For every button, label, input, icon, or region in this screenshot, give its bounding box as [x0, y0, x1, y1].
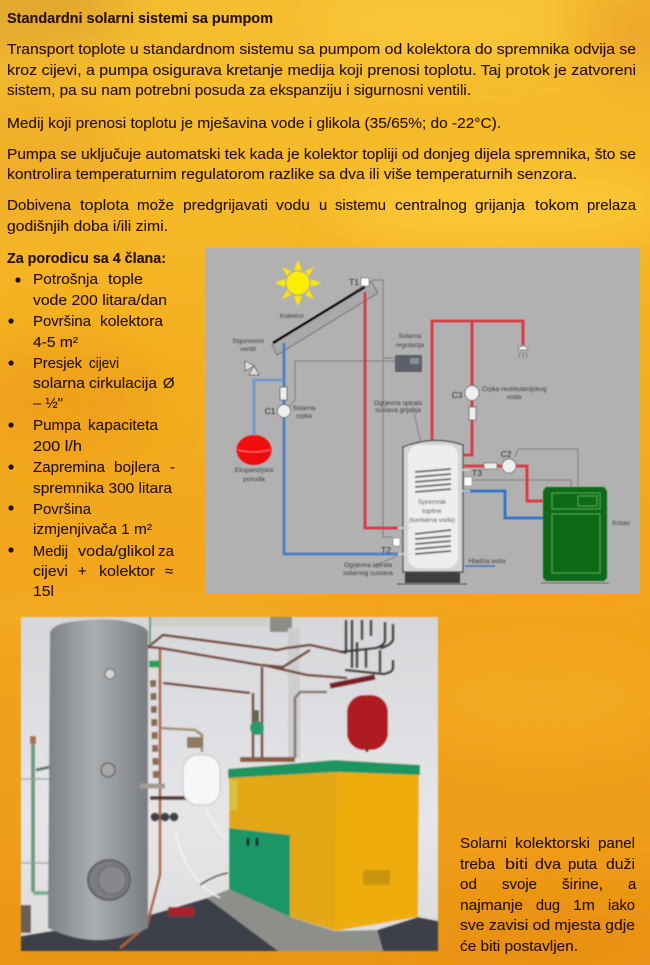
text block: collector panel note: duži	[606, 857, 635, 873]
bullet list: specifications: kapaciteta	[88, 418, 159, 434]
bullet list: specifications: 15l	[33, 584, 54, 600]
safety valve	[232, 338, 264, 375]
storage tank: sustava grijanja	[375, 407, 421, 414]
text block: collector panel note: dva	[535, 857, 562, 873]
bullet list: specifications	[8, 272, 175, 600]
storage tank: (kantarna voda)	[409, 517, 455, 524]
text block: heat use: prelaza	[587, 198, 637, 214]
solar collector	[272, 281, 378, 355]
text block: heat use: u	[319, 198, 327, 214]
text block: heat use	[7, 198, 637, 235]
storage tank: Ogrjevna spirala	[374, 400, 422, 407]
bullet list: specifications: cijevi	[89, 356, 119, 372]
storage tank: Ogrjevna spirala	[344, 562, 392, 569]
text block: collector panel note: kolektorski	[515, 836, 590, 852]
text block: heat use: vodu	[276, 198, 310, 214]
text block: pump control: kontrolira temperaturnim regulatorom razlike sa dva ili više temperaturnih senzora.	[7, 167, 577, 183]
pump C3: voda	[507, 394, 521, 401]
text block: collector panel note: širine,	[562, 877, 603, 893]
bullet list: specifications: Presjek	[33, 356, 83, 372]
text block: collector panel note: će biti postavljen.	[460, 939, 578, 955]
sensors T2 and T3	[381, 468, 482, 555]
text block: collector panel note: treba	[460, 857, 496, 873]
sensors T2 and T3: T2	[381, 545, 391, 555]
text block: heat use: sistemu	[335, 198, 386, 214]
text block: heat use: godišnjih doba i/ili zimi.	[7, 219, 168, 235]
green circulation pump	[240, 710, 295, 762]
text block: heat use: može	[137, 198, 174, 214]
pipes on wall	[120, 635, 347, 948]
pump C2	[484, 449, 516, 473]
bullet list: specifications: kolektor	[99, 564, 155, 580]
solar controller	[395, 333, 424, 372]
text block: collector panel note: 1m	[573, 898, 595, 914]
bullet list: specifications: za	[158, 544, 175, 560]
cold water label: Hladna voda	[468, 558, 506, 565]
storage tank: Spremnik	[418, 499, 447, 506]
text block: heat use: predgrijavati	[183, 198, 268, 214]
bullet list: specifications: Površina	[33, 502, 92, 518]
diagram: solar heating system schematic	[205, 248, 640, 594]
bullet list: specifications: bojlera	[114, 460, 161, 476]
boiler: Kotao	[612, 520, 630, 527]
bullet list: specifications: tople	[108, 272, 143, 288]
text block: heat use: toplota	[80, 198, 130, 214]
bullet list: specifications: Zapremina	[33, 460, 106, 476]
text block: heat use: grijanja	[475, 198, 526, 214]
solar collector: Kolektor	[280, 313, 305, 320]
text block: medium: Medij koji prenosi toplotu je mješavina vode i glikola (35/65%; do -22°C).	[7, 116, 501, 132]
expansion vessel	[235, 435, 274, 483]
bullet list: specifications: spremnika 300 litara	[33, 481, 173, 497]
storage tank: solarnog sustava	[343, 570, 393, 577]
text block: pump control	[7, 147, 636, 183]
pump C2: C2	[501, 449, 512, 459]
yellow and green boiler	[228, 760, 420, 931]
wall and floor tones	[21, 617, 438, 951]
icon: sun	[275, 260, 321, 306]
bullet list: specifications: ≈	[165, 564, 173, 580]
storage tank: topline	[422, 508, 442, 515]
text block: collector panel note: iako	[608, 898, 635, 914]
pump C1: Solarna	[293, 405, 316, 412]
text block: heat use: centralnog	[395, 198, 467, 214]
wall pipe left green	[21, 617, 160, 893]
text block: intro paragraph	[7, 42, 636, 99]
dark pipe cluster top right	[340, 620, 393, 674]
pump C3: Crpka recirkulacijskog	[482, 386, 547, 393]
white expansion vessel	[183, 755, 220, 805]
sensors T2 and T3: T3	[472, 468, 482, 478]
text block: collector panel note: puta	[568, 857, 598, 873]
text block: heat use: tokom	[535, 198, 579, 214]
text block: collector panel note: svoje	[502, 877, 537, 893]
text block: collector panel note: Solarni	[460, 836, 507, 852]
bullet list: specifications: vode 200 litara/dan	[33, 293, 167, 309]
bullet list: specifications: voda/glikol	[78, 544, 155, 560]
bullet list: specifications: cijevi	[33, 564, 68, 580]
bullet list: specifications: 200 l/h	[33, 439, 82, 455]
wiring	[288, 280, 578, 567]
pump C1	[265, 387, 316, 420]
pump C1: crpka	[296, 413, 312, 420]
solar controller: regulacija	[396, 342, 424, 349]
text block: collector panel note: najmanje	[460, 898, 523, 914]
sensor T1	[349, 277, 369, 287]
pump C3: C3	[452, 390, 463, 400]
text block: collector panel note: sve zavisi od mjesta gdje	[460, 918, 635, 934]
text block: collector panel note	[460, 836, 637, 955]
bullet list: specifications: kolektora	[100, 314, 164, 330]
text block: intro paragraph: sistem, pa su nam potrebni posuda za ekspanziju i sigurnosni ventili.	[7, 83, 471, 99]
bullet list: specifications: Potrošnja	[33, 272, 99, 288]
safety valve: ventil	[240, 346, 256, 353]
fittings and pipework beside tank	[150, 680, 228, 916]
bullet list: specifications: 4-5 m²	[33, 335, 78, 351]
text block: collector panel note: dug	[536, 898, 560, 914]
storage tank	[343, 400, 470, 584]
pipes: blue cold circuit	[254, 343, 544, 566]
bullet list: specifications: izmjenjivača 1 m²	[33, 522, 152, 538]
photo: boiler room installation	[21, 617, 438, 951]
large grey tank	[48, 619, 165, 940]
bullet list: specifications: Pumpa	[33, 418, 82, 434]
bullet list: specifications: Medij	[33, 544, 68, 560]
bullet list: specifications: Ø	[163, 376, 175, 392]
heading: family of four: Za porodicu sa 4 člana:	[7, 251, 166, 267]
bullet list: specifications: -	[170, 460, 175, 476]
expansion vessel: posuda	[243, 476, 265, 483]
text block: collector panel note: panel	[598, 836, 635, 852]
bullet list: specifications: solarna	[33, 376, 86, 392]
text block: pump control: Pumpa se uključuje automatski tek kada je kolektor topliji od donjeg dijela spremnika, što se	[7, 147, 636, 163]
sensor T1: T1	[349, 277, 359, 287]
title: Standardni solarni sistemi sa pumpom	[7, 11, 273, 27]
text block: collector panel note: a	[628, 877, 637, 893]
text block: intro paragraph: Transport toplote u standardnom sistemu sa pumpom od kolektora do spremnika odvija se	[7, 42, 636, 58]
solar controller: Solarna	[399, 333, 422, 340]
text block: intro paragraph: kroz cijevi, a pumpa osigurava kretanje medija koji prenosi toplotu. Taj protok je zatvoreni	[7, 63, 636, 79]
bullet list: specifications: – ½"	[33, 396, 63, 412]
boiler	[541, 487, 630, 583]
red expansion vessel	[347, 695, 388, 752]
bullet list: specifications: +	[78, 564, 87, 580]
pipes: red hot circuit	[365, 292, 544, 528]
bullet list: specifications: Površina	[33, 314, 92, 330]
bullet list: specifications: cirkulacija	[89, 376, 158, 392]
safety valve: Sigurnosni	[232, 338, 264, 345]
text block: collector panel note: od	[460, 877, 477, 893]
pump C1: C1	[265, 406, 276, 416]
pump C3	[452, 386, 547, 420]
expansion vessel: Ekspanzijska	[235, 467, 274, 474]
text block: heat use: Dobivena	[7, 198, 72, 214]
red manifold	[330, 677, 375, 686]
text block: collector panel note: biti	[505, 857, 528, 873]
icon: shower	[518, 346, 528, 358]
